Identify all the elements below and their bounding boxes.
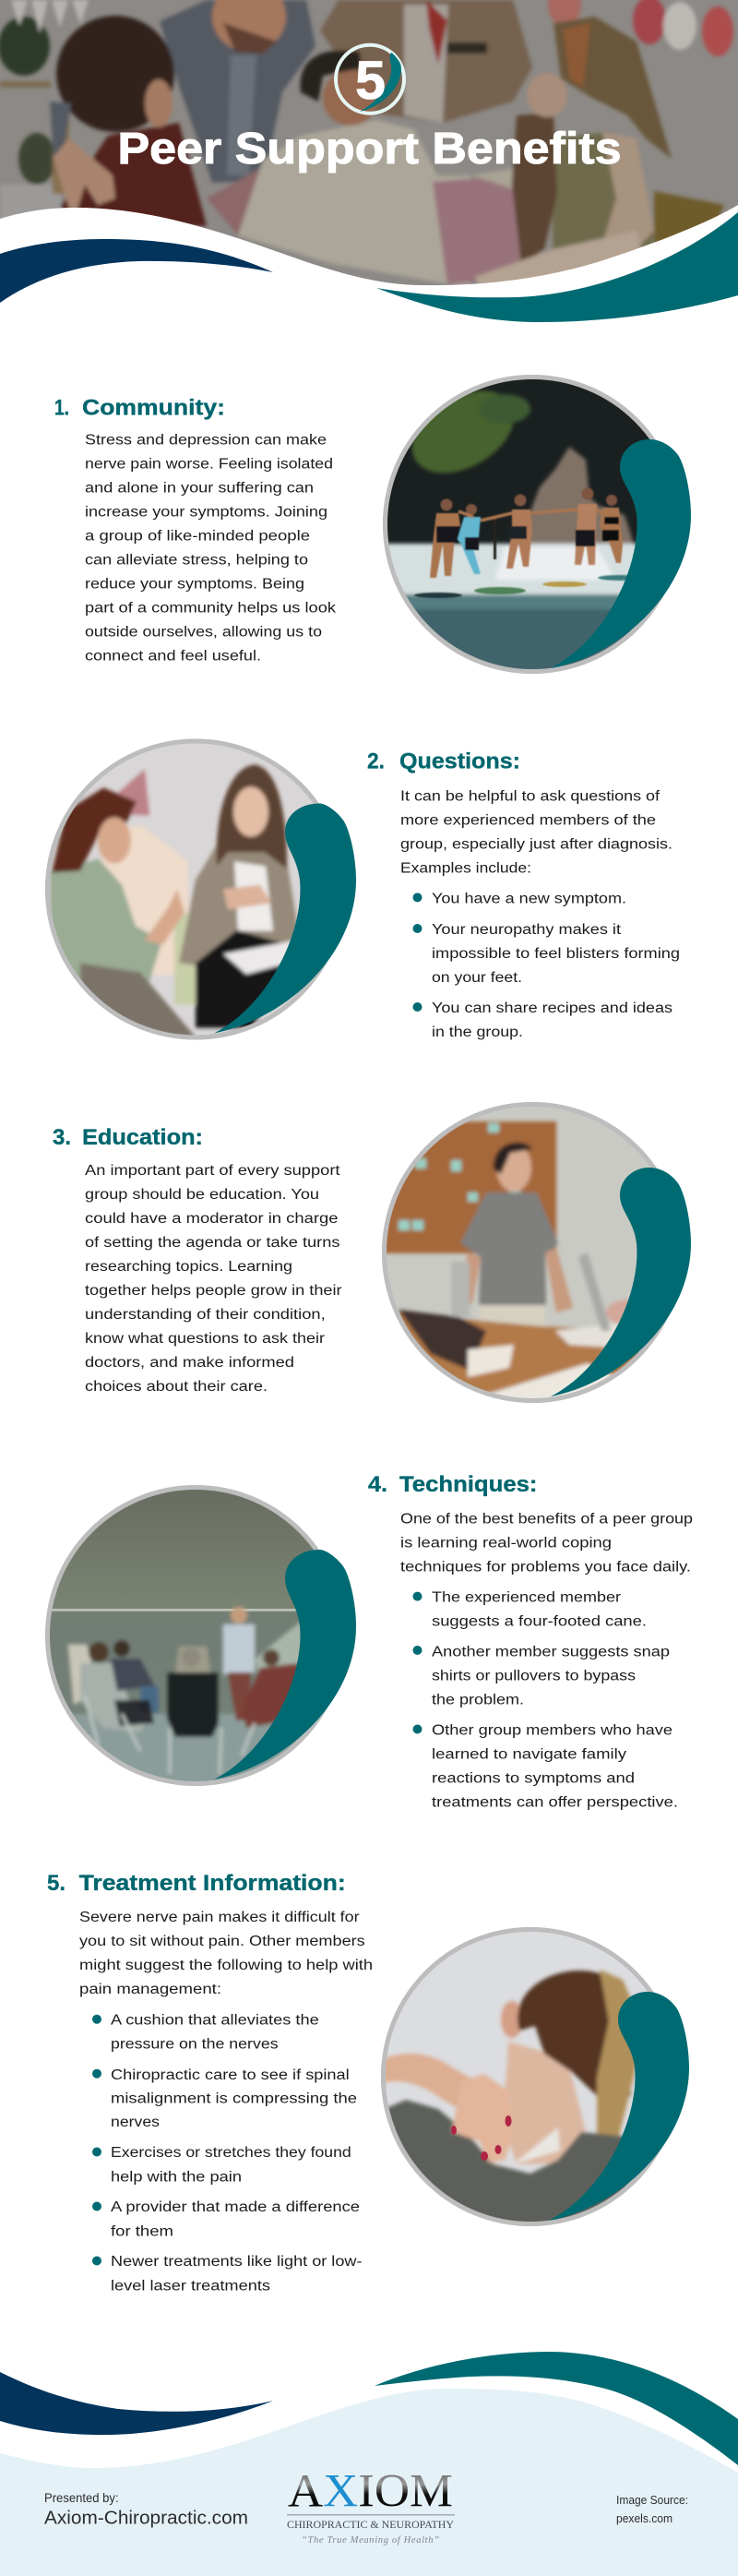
text: treatment information: pain management: <box>79 1982 221 1997</box>
text: education: choices about their care. <box>85 1379 268 1395</box>
text: education: together helps people grow in their <box>85 1283 342 1299</box>
list: treatment options: Exercises or stretches they found <box>111 2145 351 2161</box>
text: community: Stress and depression can make <box>85 432 327 449</box>
list: treatment options: help with the pain <box>111 2169 242 2185</box>
heading: techniques: 4. <box>368 1472 387 1497</box>
heading: education: Education: <box>82 1125 203 1150</box>
list: treatment options: A provider that made a difference <box>111 2199 360 2215</box>
text: community: and alone in your suffering can <box>85 480 314 497</box>
list: techniques: Other group members who have <box>432 1723 673 1739</box>
list: techniques: treatments can offer perspective. <box>432 1795 678 1811</box>
list: questions: impossible to feel blisters forming <box>432 946 680 962</box>
panel: education <box>53 1096 691 1409</box>
heading: treatment information: Treatment Information: <box>79 1871 346 1896</box>
list: treatment options: level laser treatments <box>111 2278 270 2294</box>
panel: techniques <box>39 1472 693 1811</box>
text: techniques <box>400 1512 693 1575</box>
text: community: part of a community helps us look <box>85 600 336 617</box>
text: community: nerve pain worse. Feeling isolated <box>85 456 333 473</box>
panel: community <box>54 367 691 681</box>
panel: treatment information <box>47 1871 689 2294</box>
heading number badge: 5 <box>355 51 386 111</box>
footer: image source <box>616 2493 688 2525</box>
footer: presented by <box>44 2490 248 2529</box>
text: education: doctors, and make informed <box>85 1355 294 1371</box>
heading: questions: Questions: <box>399 749 520 773</box>
logo: Axiom: “The True Meaning of Health” <box>302 2535 439 2546</box>
text: community: outside ourselves, allowing us to <box>85 624 322 641</box>
text: treatment information: might suggest the following to help with <box>79 1958 373 1973</box>
heading: community: Community: <box>82 395 225 421</box>
list: questions: Your neuropathy makes it <box>432 922 622 938</box>
text: techniques: is learning real-world coping <box>400 1536 612 1551</box>
footer: presented by: Presented by: <box>44 2490 119 2505</box>
footer: image source: pexels.com <box>616 2511 673 2525</box>
list: techniques: the problem. <box>432 1692 524 1707</box>
logo: Axiom: AXIOM <box>288 2466 453 2518</box>
list: treatment options <box>92 2013 362 2294</box>
heading number badge <box>336 45 404 114</box>
list: techniques: suggests a four-footed cane. <box>432 1614 647 1630</box>
list: treatment options: for them <box>111 2223 173 2239</box>
list: techniques: Another member suggests snap <box>432 1644 670 1659</box>
header wave: navy <box>0 239 273 303</box>
photo: surfers in circle <box>375 367 691 681</box>
list: treatment options: A cushion that alleviates the <box>111 2013 319 2029</box>
list: questions: in the group. <box>432 1024 523 1040</box>
header wave: teal <box>376 212 738 322</box>
text: questions: group, especially just after diagnosis. <box>400 836 673 852</box>
logo: Axiom: CHIROPRACTIC & NEUROPATHY <box>287 2518 454 2531</box>
footer: presented by: Axiom-Chiropractic.com <box>44 2509 248 2529</box>
list: treatment options: pressure on the nerves <box>111 2036 279 2053</box>
text: community <box>85 432 336 665</box>
text: treatment information: Severe nerve pain makes it difficult for <box>79 1910 360 1925</box>
text: education: An important part of every support <box>85 1163 340 1179</box>
photo: support group in hall in circle <box>39 1479 356 1792</box>
photo: woman at conference table in circle <box>375 1096 691 1409</box>
text: education: could have a moderator in charge <box>85 1211 338 1227</box>
list: techniques: learned to navigate family <box>432 1747 626 1763</box>
text: questions: It can be helpful to ask questions of <box>400 788 661 804</box>
list: questions <box>413 892 680 1040</box>
text: education <box>85 1163 342 1395</box>
list: techniques: shirts or pullovers to bypass <box>432 1668 636 1683</box>
text: questions: more experienced members of the <box>400 812 656 828</box>
header wave: white <box>0 205 738 341</box>
text: education: of setting the agenda or take turns <box>85 1235 340 1251</box>
photo: woman holding neck in circle <box>374 1920 689 2234</box>
list: treatment options: nerves <box>111 2115 160 2130</box>
logo: Axiom <box>287 2466 455 2546</box>
panel: questions <box>39 733 680 1047</box>
text: questions <box>400 788 673 876</box>
heading: education: 3. <box>53 1125 71 1150</box>
heading: techniques: Techniques: <box>399 1472 537 1497</box>
text: education: group should be education. You <box>85 1187 319 1203</box>
text: community: increase your symptoms. Joining <box>85 504 327 521</box>
list: techniques: reactions to symptoms and <box>432 1771 635 1787</box>
text: community: connect and feel useful. <box>85 648 261 665</box>
footer: image source: Image Source: <box>616 2493 688 2507</box>
heading: questions: 2. <box>367 749 385 773</box>
title: Peer Support Benefits <box>118 125 622 174</box>
list: techniques: The experienced member <box>432 1590 621 1606</box>
text: community: a group of like-minded people <box>85 528 310 545</box>
list: questions: You have a new symptom. <box>432 892 626 907</box>
photo: two women talking in circle <box>39 733 356 1047</box>
list: questions: You can share recipes and ideas <box>432 1000 673 1016</box>
text: community: reduce your symptoms. Being <box>85 576 304 593</box>
heading: treatment information: 5. <box>47 1871 65 1896</box>
header photo: group of friends <box>0 0 738 305</box>
list: treatment options: Newer treatments like light or low- <box>111 2254 362 2270</box>
footer wave: teal <box>375 2352 738 2465</box>
text: education: researching topics. Learning <box>85 1259 292 1275</box>
text: techniques: One of the best benefits of a peer group <box>400 1512 693 1527</box>
list: techniques <box>413 1590 678 1811</box>
footer wave: navy <box>0 2372 273 2435</box>
list: treatment options: Chiropractic care to see if spinal <box>111 2067 350 2083</box>
list: questions: on your feet. <box>432 970 522 986</box>
text: techniques: techniques for problems you face daily. <box>400 1560 691 1575</box>
text: questions: Examples include: <box>400 860 531 876</box>
text: treatment information <box>79 1910 373 1997</box>
text: education: understanding of their condition, <box>85 1307 326 1323</box>
footer background <box>0 2389 738 2576</box>
list: treatment options: misalignment is compressing the <box>111 2091 357 2106</box>
heading: community: 1. <box>54 395 69 421</box>
text: treatment information: you to sit without pain. Other members <box>79 1934 365 1949</box>
text: community: can alleviate stress, helping to <box>85 552 308 569</box>
text: education: know what questions to ask their <box>85 1331 325 1347</box>
